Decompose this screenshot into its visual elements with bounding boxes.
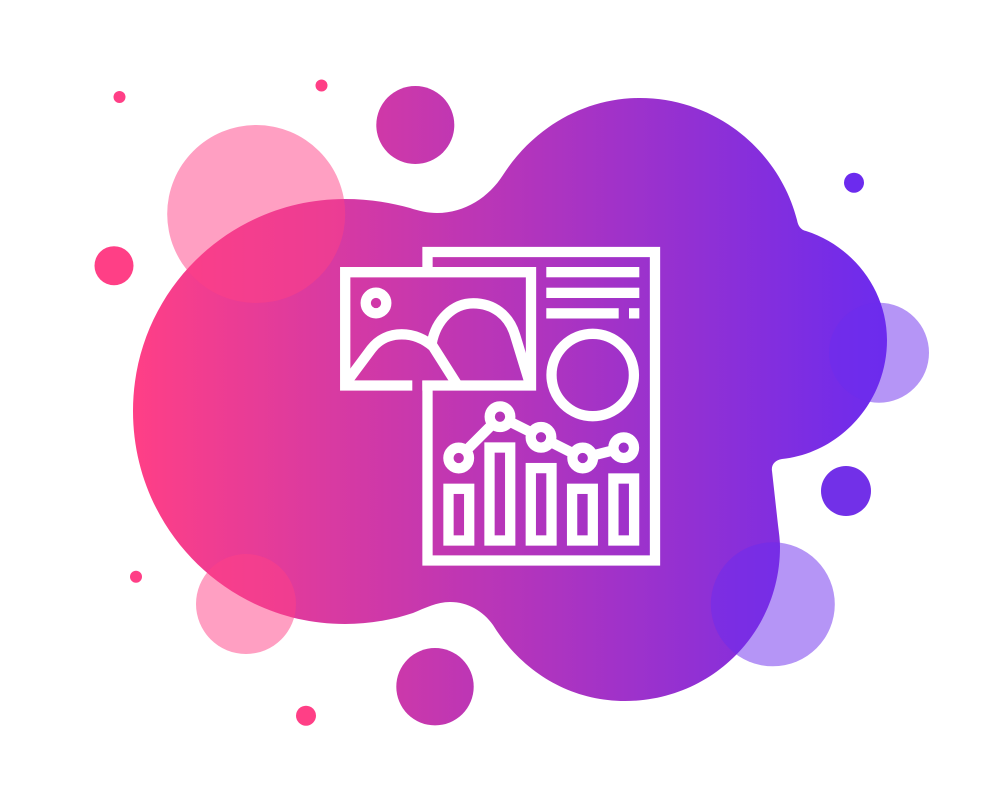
- dot: pink small top left: [114, 91, 126, 103]
- bubble: magenta bottom: [396, 648, 474, 725]
- dot: violet top right: [844, 173, 864, 193]
- bar chart: [448, 448, 634, 540]
- dot: pink left: [94, 246, 134, 285]
- bubble: magenta top: [376, 86, 454, 164]
- bubble: translucent pink bottom left: [196, 554, 296, 654]
- dot: pink small top: [316, 80, 328, 92]
- dot: pink small bottom left: [130, 571, 142, 583]
- bubble: translucent violet bottom right: [711, 542, 835, 666]
- document outline: [428, 252, 655, 560]
- bubble: violet right: [821, 466, 871, 516]
- picture sun: [366, 293, 386, 313]
- bubble: large translucent pink top left: [167, 125, 345, 303]
- icon: data report document: [345, 252, 655, 560]
- blob: gradient cloud shape: [133, 98, 887, 701]
- picture left hill: [346, 334, 457, 385]
- line chart: [448, 406, 634, 468]
- picture frame: [345, 272, 531, 386]
- picture right hill: [432, 303, 530, 385]
- bubble: translucent violet right: [829, 303, 929, 403]
- text lines: [546, 267, 639, 318]
- dot: pink bottom: [296, 706, 316, 726]
- pie circle: [552, 334, 634, 416]
